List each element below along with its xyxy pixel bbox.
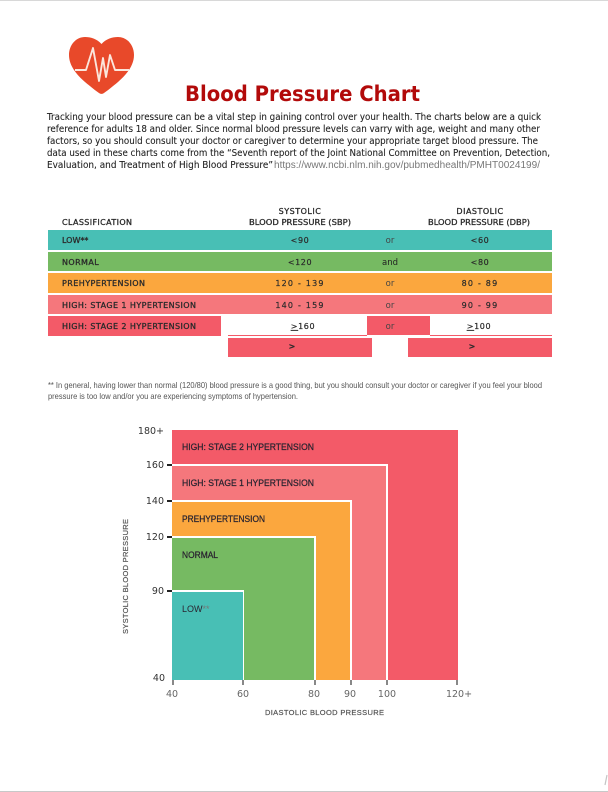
footnote: ** In general, having lower than normal (120/80) blood pressure is a good thing, but you should consult your doctor or caregiver if you feel your blood (48, 381, 542, 390)
table row: stage 2 continued (228, 338, 552, 357)
table header: BLOOD PRESSURE (SBP) (249, 218, 351, 227)
zone: stage 1 (172, 464, 388, 680)
table row: stage 2 (48, 316, 552, 336)
y axis ticks and labels: 140 (146, 496, 164, 507)
footnote: pressure is too low and/or you are experiencing symptoms of hypertension. (48, 392, 298, 401)
zone: stage 1: HIGH: STAGE 1 HYPERTENSION (182, 478, 314, 488)
zone: low (172, 590, 244, 680)
table row: normal: <120 (288, 258, 312, 267)
table row: prehypertension: 80 - 89 (462, 279, 498, 288)
intro text block: reference for adults 18 and older. Since normal blood pressure levels can varry with age, weight and many other (47, 124, 541, 135)
zone: normal: NORMAL (182, 550, 218, 560)
x axis ticks and labels: 60 (237, 689, 249, 700)
table row: stage 1: 90 - 99 (462, 301, 498, 310)
intro text block: factors, so you should consult your doctor or caregiver to determine your appropriate target blood pressure. The (47, 136, 538, 147)
table row: stage 2: >100 (467, 322, 491, 331)
zone: low: LOW** (182, 604, 210, 614)
table header: CLASSIFICATION (62, 218, 132, 227)
intro text block: https://www.ncbi.nlm.nih.gov/pubmedhealth/PMHT0024199/ (274, 160, 540, 171)
table row: low (48, 230, 552, 250)
intro text block: Evaluation, and Treatment of High Blood Pressure” (47, 160, 273, 171)
table header: BLOOD PRESSURE (DBP) (428, 218, 530, 227)
table row: prehypertension: or (386, 279, 395, 289)
chart: nested blood pressure zones (121, 426, 472, 717)
table row: stage 2: >160 (291, 322, 315, 331)
y axis ticks and labels: 40 (153, 673, 165, 684)
footnote (48, 381, 542, 401)
title: Blood Pressure Chart (185, 82, 420, 106)
zone: stage 2 (172, 430, 458, 680)
zone: prehypertension: PREHYPERTENSION (182, 514, 265, 524)
intro text block: Tracking your blood pressure can be a vital step in gaining control over your health. The charts below are a quick (46, 112, 541, 123)
zone: stage 2: HIGH: STAGE 2 HYPERTENSION (182, 442, 314, 452)
table row: prehypertension: PREHYPERTENSION (62, 279, 145, 288)
table row: normal: and (382, 258, 398, 268)
table row: stage 2: or (386, 322, 395, 332)
y axis ticks and labels: 180+ (138, 426, 164, 437)
table row: low: LOW** (62, 236, 88, 245)
x axis ticks and labels: 90 (344, 689, 356, 700)
zone: prehypertension (172, 500, 352, 680)
table row: stage 1: HIGH: STAGE 1 HYPERTENSION (62, 301, 196, 310)
table row: stage 2 continued: > (469, 342, 475, 351)
table header (62, 207, 530, 227)
table row: normal: NORMAL (62, 258, 99, 267)
x axis ticks and labels: 40 (166, 689, 178, 700)
x axis ticks and labels: 100 (378, 689, 396, 700)
table row: normal (48, 252, 552, 271)
x axis ticks and labels (166, 680, 472, 700)
table row: normal: <80 (471, 258, 489, 267)
zone: normal (172, 536, 316, 680)
x axis ticks and labels: 120+ (446, 689, 472, 700)
x axis title: DIASTOLIC BLOOD PRESSURE (265, 708, 384, 717)
table row: low: or (386, 236, 395, 246)
x axis ticks and labels: 80 (308, 689, 320, 700)
table row: stage 1: or (386, 301, 395, 311)
intro text block (46, 112, 550, 171)
table row: low: <90 (291, 236, 309, 245)
table header: SYSTOLIC (279, 207, 321, 216)
icon: heart with pulse line (69, 37, 134, 94)
y axis title: SYSTOLIC BLOOD PRESSURE (121, 519, 130, 634)
table row: stage 2 continued: > (289, 342, 295, 351)
y axis ticks and labels: 160 (146, 460, 164, 471)
table row: stage 1 (48, 295, 552, 314)
y axis ticks and labels: 120 (146, 532, 164, 543)
y axis ticks and labels (138, 426, 172, 684)
table row: prehypertension (48, 273, 552, 293)
table row: prehypertension: 120 - 139 (275, 279, 325, 288)
y axis ticks and labels: 90 (152, 586, 164, 597)
table row: stage 1: 140 - 159 (275, 301, 325, 310)
table header: DIASTOLIC (456, 207, 504, 216)
table row: low: <60 (471, 236, 489, 245)
table row: stage 2: HIGH: STAGE 2 HYPERTENSION (62, 322, 196, 331)
